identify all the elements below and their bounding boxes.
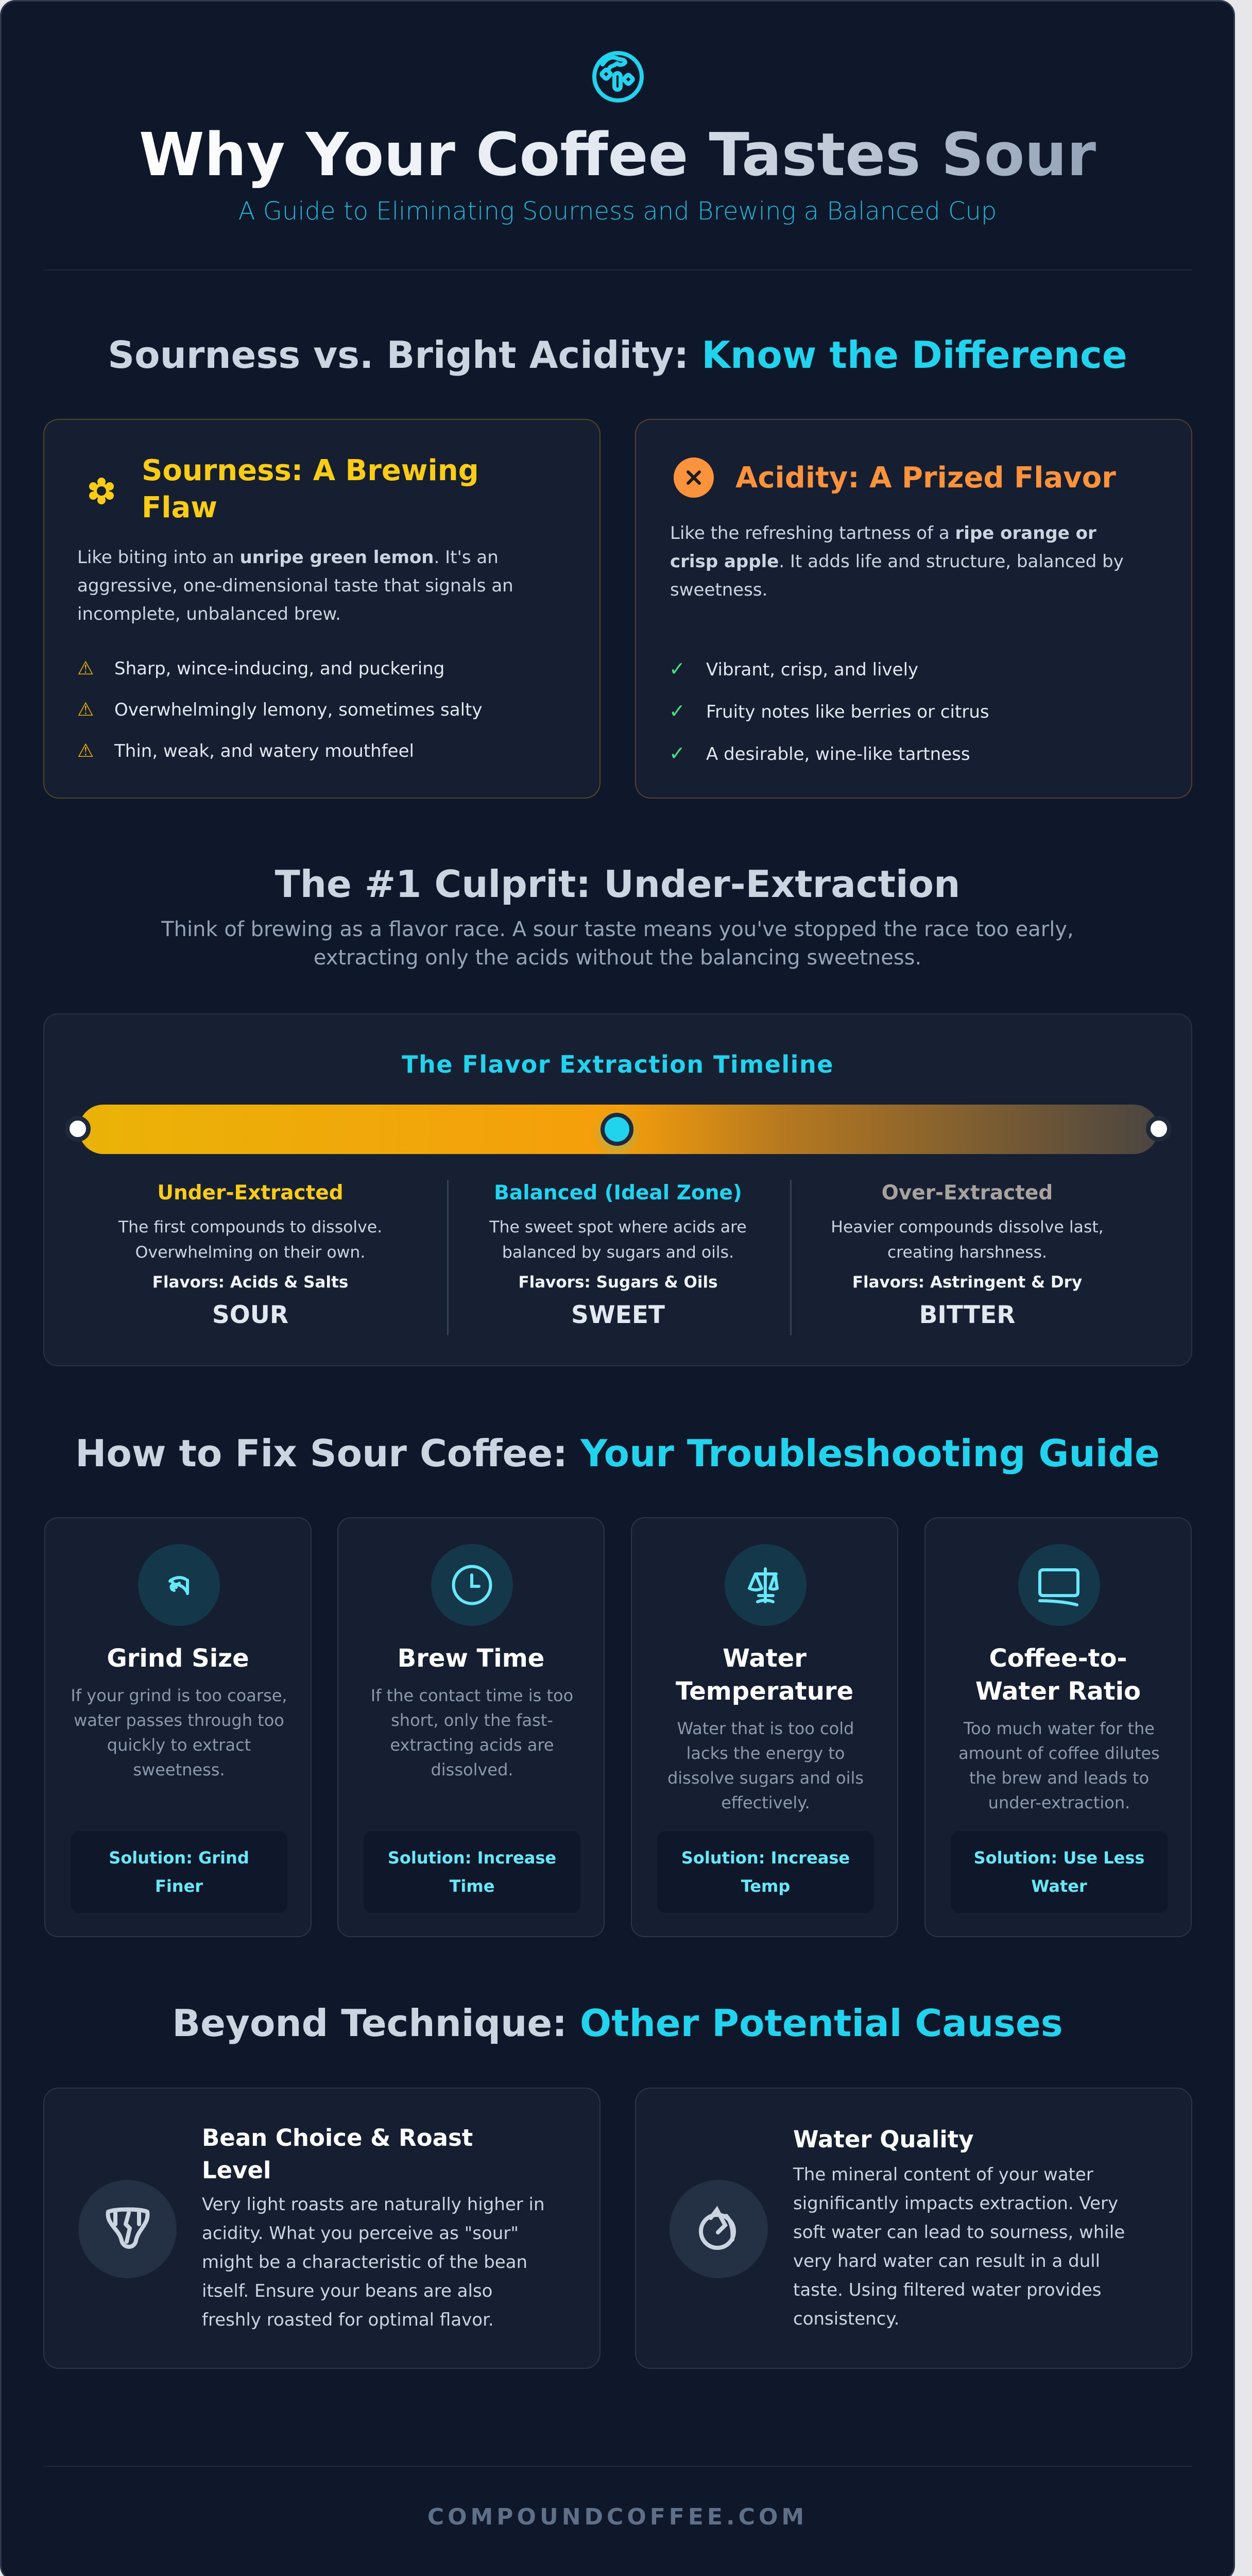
body text	[670, 523, 1124, 600]
solution: Solution: Increase	[681, 1848, 850, 1868]
timeline title: The Flavor Extraction Timeline	[402, 1050, 834, 1078]
solution	[364, 1831, 580, 1913]
list: acidity traits: Fruity notes like berries or citrus	[706, 702, 989, 722]
column: balanced: The sweet spot where acids are	[489, 1218, 747, 1236]
icon: ratio	[1018, 1544, 1100, 1626]
icon: water	[670, 2180, 768, 2278]
column: over-extracted: Over-Extracted	[882, 1181, 1053, 1205]
column: balanced: SWEET	[571, 1301, 665, 1329]
intro text: Think of brewing as a flavor race. A sour taste means you've stopped the race too early,	[161, 918, 1074, 941]
description: amount of coffee dilutes	[958, 1743, 1160, 1763]
title: Grind Size	[107, 1644, 249, 1673]
body text: crisp apple. It adds life and structure, balanced by	[670, 551, 1124, 572]
title: Temperature	[676, 1677, 853, 1706]
body: The mineral content of your water	[793, 2164, 1093, 2185]
title: Why Your Coffee Tastes Sour	[139, 121, 1096, 190]
body text: sweetness.	[670, 580, 767, 600]
column: under-extracted: SOUR	[212, 1301, 288, 1329]
icon: grinder	[138, 1544, 220, 1626]
title: Water	[723, 1644, 807, 1673]
footer: COMPOUNDCOFFEE.COM	[427, 2504, 808, 2530]
icon: orange circle x	[674, 457, 714, 498]
panel heading: Flaw	[142, 491, 217, 524]
column: over-extracted: BITTER	[919, 1301, 1015, 1329]
body: taste. Using filtered water provides	[793, 2280, 1101, 2300]
heading: troubleshooting: How to Fix Sour Coffee: Your Troubleshooting Guide	[75, 1432, 1160, 1475]
body: freshly roasted for optimal flavor.	[202, 2310, 494, 2330]
body: itself. Ensure your beans are also	[202, 2281, 492, 2301]
description: extracting acids are	[390, 1735, 554, 1755]
description: Too much water for the	[964, 1719, 1155, 1738]
card: water quality	[635, 2088, 1192, 2369]
solution	[657, 1831, 874, 1913]
card: brew time	[337, 1517, 605, 1937]
list: sour traits	[77, 658, 482, 761]
icon: yellow gear	[89, 478, 114, 504]
list: sour traits: Thin, weak, and watery mouthfeel	[114, 741, 414, 761]
description: water passes through too	[74, 1710, 284, 1730]
column: under-extracted: Overwhelming on their own.	[135, 1243, 365, 1262]
description: Water that is too cold	[677, 1719, 854, 1738]
column: under-extracted: The first compounds to dissolve.	[118, 1218, 382, 1236]
solution: Temp	[741, 1876, 790, 1896]
solution	[71, 1831, 287, 1913]
title: Level	[202, 2157, 271, 2184]
gradient bar	[79, 1105, 1158, 1154]
list: acidity traits: ✓	[669, 700, 685, 722]
body text	[77, 547, 513, 624]
title	[925, 1642, 1191, 1708]
title: Water Quality	[793, 2126, 974, 2153]
solution: Solution: Grind	[109, 1848, 249, 1868]
solution: Solution: Increase	[388, 1848, 556, 1868]
column: over-extracted: creating harshness.	[887, 1243, 1047, 1262]
dot: end	[1146, 1116, 1172, 1142]
panel heading: Sourness: A Brewing	[142, 454, 479, 487]
panel: sourness	[43, 419, 601, 799]
body: might be a characteristic of the bean	[202, 2252, 527, 2273]
solution: Finer	[155, 1876, 203, 1896]
icon: clock	[431, 1544, 513, 1626]
list: sour traits: ⚠	[77, 740, 94, 761]
subtitle: A Guide to Eliminating Sourness and Brewing a Balanced Cup	[238, 197, 997, 226]
body text: Like biting into an unripe green lemon. It's an	[77, 547, 499, 568]
column: under-extracted: Flavors: Acids & Salts	[152, 1273, 348, 1292]
heading: other causes: Beyond Technique: Other Potential Causes	[172, 2002, 1063, 2045]
list: sour traits: Sharp, wince-inducing, and puckering	[114, 658, 444, 679]
list: acidity traits: A desirable, wine-like tartness	[706, 744, 970, 765]
description	[371, 1686, 573, 1780]
body: acidity. What you perceive as "sour"	[202, 2223, 519, 2244]
title	[202, 2122, 573, 2187]
icon: coffee bean globe	[592, 51, 644, 103]
panel heading: Acidity: A Prized Flavor	[735, 461, 1116, 495]
column: over-extracted: Flavors: Astringent & Dry	[852, 1273, 1082, 1292]
column: over-extracted: Heavier compounds dissolve last,	[831, 1218, 1104, 1236]
title	[676, 1644, 853, 1706]
body	[202, 2190, 583, 2334]
solution: Water	[1031, 1876, 1087, 1896]
description	[637, 1716, 894, 1815]
icon: scale	[725, 1544, 807, 1626]
title: Brew Time	[398, 1644, 544, 1673]
column: over-extracted	[831, 1181, 1104, 1329]
card: grind size	[44, 1517, 312, 1937]
description: lacks the energy to	[687, 1743, 845, 1763]
intro text	[161, 918, 1074, 970]
column: balanced	[489, 1181, 747, 1329]
panel heading	[142, 454, 479, 524]
body: Very light roasts are naturally higher in	[202, 2194, 545, 2215]
list: acidity traits: ✓	[669, 742, 685, 765]
description: sweetness.	[133, 1760, 225, 1780]
body	[793, 2160, 1185, 2333]
column: balanced: Balanced (Ideal Zone)	[494, 1181, 742, 1205]
description	[71, 1686, 287, 1780]
column: balanced: balanced by sugars and oils.	[502, 1243, 734, 1262]
body: soft water can lead to sourness, while	[793, 2222, 1125, 2243]
list: acidity traits	[669, 657, 989, 765]
panel: acidity	[635, 419, 1192, 799]
column: under-extracted	[118, 1181, 382, 1329]
body text: aggressive, one-dimensional taste that signals an	[77, 575, 513, 596]
list: acidity traits: ✓	[669, 657, 685, 680]
solution: Time	[450, 1876, 494, 1896]
title: Bean Choice & Roast	[202, 2124, 473, 2151]
list: sour traits: ⚠	[77, 699, 94, 720]
card: bean choice	[43, 2088, 601, 2369]
body text: Like the refreshing tartness of a ripe orange or	[670, 523, 1096, 544]
description: under-extraction.	[988, 1793, 1130, 1812]
description: quickly to extract	[107, 1735, 251, 1755]
description: short, only the fast-	[391, 1710, 553, 1730]
heading: sourness vs acidity: Sourness vs. Bright Acidity: Know the Difference	[108, 333, 1127, 377]
description: If your grind is too coarse,	[71, 1686, 287, 1705]
description	[931, 1716, 1188, 1815]
title: Water Ratio	[975, 1677, 1141, 1706]
card: ratio	[924, 1517, 1192, 1937]
column: under-extracted: Under-Extracted	[157, 1181, 344, 1205]
icon: bean	[78, 2180, 177, 2278]
panel: extraction timeline	[43, 1013, 1192, 1366]
description: effectively.	[721, 1793, 810, 1812]
body: consistency.	[793, 2309, 899, 2329]
body text: incomplete, unbalanced brew.	[77, 604, 341, 624]
description: dissolved.	[431, 1760, 513, 1780]
solution: Solution: Use Less	[974, 1848, 1144, 1868]
dot: start	[65, 1116, 91, 1142]
dot: ideal	[601, 1113, 633, 1146]
description: dissolve sugars and oils	[667, 1768, 864, 1788]
heading: culprit: The #1 Culprit: Under-Extraction	[275, 862, 960, 906]
intro text: extracting only the acids without the balancing sweetness.	[314, 946, 921, 970]
description: If the contact time is too	[371, 1686, 573, 1705]
body: significantly impacts extraction. Very	[793, 2193, 1118, 2214]
body: very hard water can result in a dull	[793, 2251, 1100, 2272]
card: water temperature	[631, 1517, 898, 1937]
description: the brew and leads to	[969, 1768, 1149, 1788]
title: Coffee-to-	[989, 1644, 1127, 1673]
list: sour traits: ⚠	[77, 658, 94, 679]
list: acidity traits: Vibrant, crisp, and lively	[706, 659, 918, 680]
solution	[951, 1831, 1168, 1913]
list: sour traits: Overwhelmingly lemony, sometimes salty	[114, 700, 482, 720]
column: balanced: Flavors: Sugars & Oils	[518, 1273, 718, 1292]
